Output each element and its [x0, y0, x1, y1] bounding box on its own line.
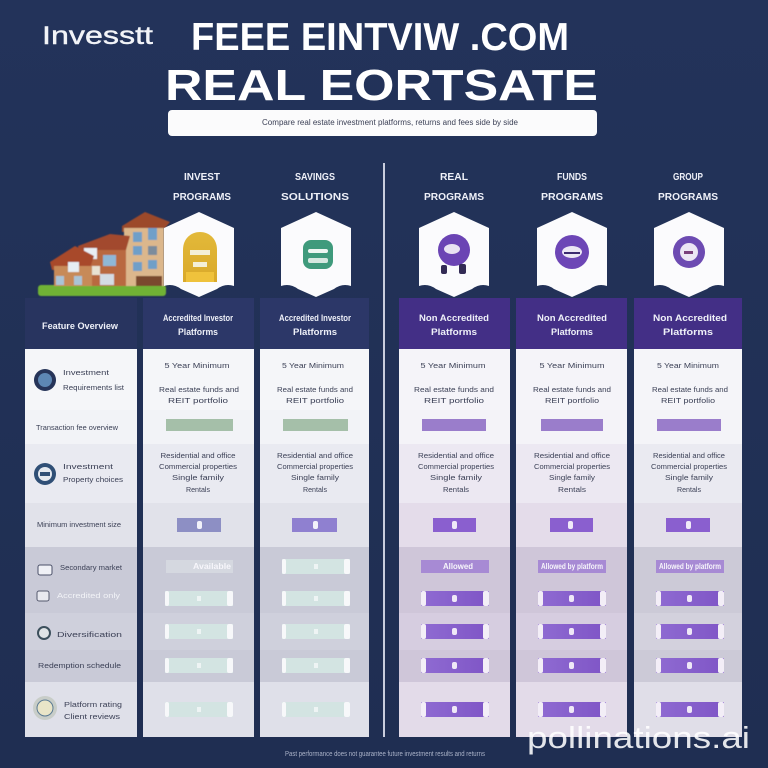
panel: column 5	[634, 298, 742, 737]
label text: Redemption schedule	[38, 661, 121, 670]
icon badge: purple one	[419, 212, 489, 297]
label text: Property choices	[63, 475, 123, 484]
brand label: Invesstt	[42, 22, 153, 50]
cell text: Rentals	[303, 485, 327, 494]
cell text: Non Accredited	[653, 313, 727, 323]
cell text	[277, 313, 353, 494]
cell text: Platforms	[178, 327, 218, 337]
label text: Investment	[63, 368, 110, 377]
rows	[634, 298, 742, 737]
cell text: Single family	[291, 473, 339, 482]
cell text: Rentals	[558, 485, 586, 494]
cell text: Residential and office	[277, 451, 353, 460]
cell text: Accredited Investor	[163, 313, 233, 323]
cell text: Commercial properties	[534, 462, 610, 471]
cell text: Platforms	[663, 327, 713, 337]
button: minimum	[177, 518, 221, 532]
cell text: REIT portfolio	[168, 396, 228, 405]
bars: ratings: Allowed	[443, 562, 473, 571]
label text: Platform rating	[64, 700, 122, 709]
bars: ratings: Allowed by platform	[541, 562, 603, 571]
title: FEEE EINTVIW .COM	[191, 16, 569, 59]
cell text: Non Accredited	[537, 313, 607, 323]
bars: ratings	[421, 560, 489, 717]
panel: column 1	[143, 298, 254, 737]
cell text: 5 Year Minimum	[282, 361, 344, 370]
cell text: REIT portfolio	[424, 396, 484, 405]
column 3 heading: REAL	[440, 172, 468, 183]
cell text: Real estate funds and	[414, 385, 494, 394]
cell text: Residential and office	[534, 451, 610, 460]
cell text: Platforms	[431, 327, 477, 337]
rows	[143, 298, 254, 737]
rows	[399, 298, 510, 737]
cell text: Rentals	[186, 485, 210, 494]
watermark: pollinations.ai	[527, 720, 750, 755]
icon: market	[38, 565, 52, 575]
panel: column 2	[260, 298, 369, 737]
bar: fees	[283, 419, 348, 431]
bars: ratings: Available	[193, 562, 232, 571]
cell text: Residential and office	[418, 451, 494, 460]
button: minimum	[292, 518, 337, 532]
cell text: Commercial properties	[418, 462, 494, 471]
cell text: Commercial properties	[277, 462, 353, 471]
column 4 heading	[541, 172, 603, 203]
label text: Minimum investment size	[37, 520, 121, 529]
column 5 heading: PROGRAMS	[658, 192, 718, 203]
panel: feature labels	[25, 298, 137, 737]
cell text: Accredited Investor	[279, 313, 351, 323]
center divider	[383, 163, 385, 737]
column 1 heading: PROGRAMS	[173, 192, 231, 203]
icon: rating shield	[33, 696, 57, 720]
subtitle bar	[168, 110, 597, 136]
cell text: Single family	[665, 473, 713, 482]
label text: Requirements list	[63, 383, 125, 392]
cell text: Residential and office	[160, 451, 236, 460]
label text	[36, 321, 125, 721]
subtitle bar: Compare real estate investment platforms, returns and fees side by side	[262, 118, 519, 127]
bar: fees	[422, 419, 486, 431]
column 2 heading: SAVINGS	[295, 172, 335, 183]
bars: ratings	[165, 560, 233, 717]
cell text: 5 Year Minimum	[420, 361, 486, 370]
column 5 heading: GROUP	[673, 172, 703, 183]
icon badge: purple three	[654, 212, 724, 297]
icon badge: gold	[164, 212, 234, 297]
cell text: Real estate funds and	[533, 385, 611, 394]
cell text: Real estate funds and	[159, 385, 239, 394]
cell text: Real estate funds and	[277, 385, 353, 394]
icon: accredited	[37, 591, 49, 601]
cell text: Commercial properties	[651, 462, 727, 471]
cell text: 5 Year Minimum	[657, 361, 719, 370]
footer note: Past performance does not guarantee future investment results and returns	[285, 751, 485, 758]
column 1 heading	[173, 172, 231, 203]
label text: Investment	[63, 462, 114, 471]
column 3 heading	[424, 172, 484, 203]
title	[165, 16, 598, 110]
cell text: Platforms	[293, 327, 337, 337]
column 2 heading: SOLUTIONS	[281, 192, 349, 203]
cell text: REIT portfolio	[286, 396, 344, 405]
icon badge: purple two	[537, 212, 607, 297]
cell text: Single family	[172, 473, 224, 482]
column 2 heading	[281, 172, 349, 203]
icon: investment	[34, 369, 56, 391]
cell text	[651, 313, 728, 494]
panel: column 3	[399, 298, 510, 737]
column 4 heading: PROGRAMS	[541, 192, 603, 203]
rows	[260, 298, 369, 737]
bars: ratings	[282, 559, 350, 717]
column 4 heading: FUNDS	[557, 172, 587, 183]
icon badge: green	[281, 212, 351, 297]
column 3 heading: PROGRAMS	[424, 192, 484, 203]
label text: Transaction fee overview	[36, 423, 119, 432]
cell text: 5 Year Minimum	[164, 361, 230, 370]
bars: ratings	[656, 560, 724, 717]
cell text: Single family	[430, 473, 482, 482]
cell text: REIT portfolio	[661, 396, 715, 405]
cell text: Real estate funds and	[652, 385, 728, 394]
cell text	[159, 313, 239, 494]
label text: Feature Overview	[42, 321, 119, 331]
cell text	[533, 313, 611, 494]
column 1 heading: INVEST	[184, 172, 220, 183]
cell text: Non Accredited	[419, 313, 489, 323]
panel: column 4	[516, 298, 627, 737]
cell text: Commercial properties	[159, 462, 237, 471]
cell text: Residential and office	[653, 451, 725, 460]
label text: Client reviews	[64, 712, 120, 721]
button: minimum	[550, 518, 593, 532]
bar: fees	[657, 419, 721, 431]
bar: fees	[166, 419, 233, 431]
label column rows	[25, 298, 137, 737]
bar: fees	[541, 419, 603, 431]
cell text: Rentals	[677, 485, 701, 494]
label text: Accredited only	[57, 591, 120, 600]
icon: property	[34, 463, 56, 485]
rows	[516, 298, 627, 737]
label text: Diversification	[57, 630, 122, 639]
bars: ratings: Allowed by platform	[659, 562, 721, 571]
cell text: Platforms	[551, 327, 593, 337]
cell text: Single family	[549, 473, 595, 482]
button: minimum	[666, 518, 710, 532]
title: REAL EORTSATE	[165, 61, 598, 110]
cell text: Rentals	[443, 485, 469, 494]
label text: Secondary market	[60, 563, 123, 572]
cell text: REIT portfolio	[545, 396, 599, 405]
illustration: houses	[38, 212, 170, 296]
cell text: 5 Year Minimum	[540, 361, 604, 370]
icon: diversification	[38, 627, 50, 639]
bars: ratings	[538, 560, 606, 717]
button: minimum	[433, 518, 476, 532]
column 5 heading	[658, 172, 718, 203]
cell text	[414, 313, 494, 494]
